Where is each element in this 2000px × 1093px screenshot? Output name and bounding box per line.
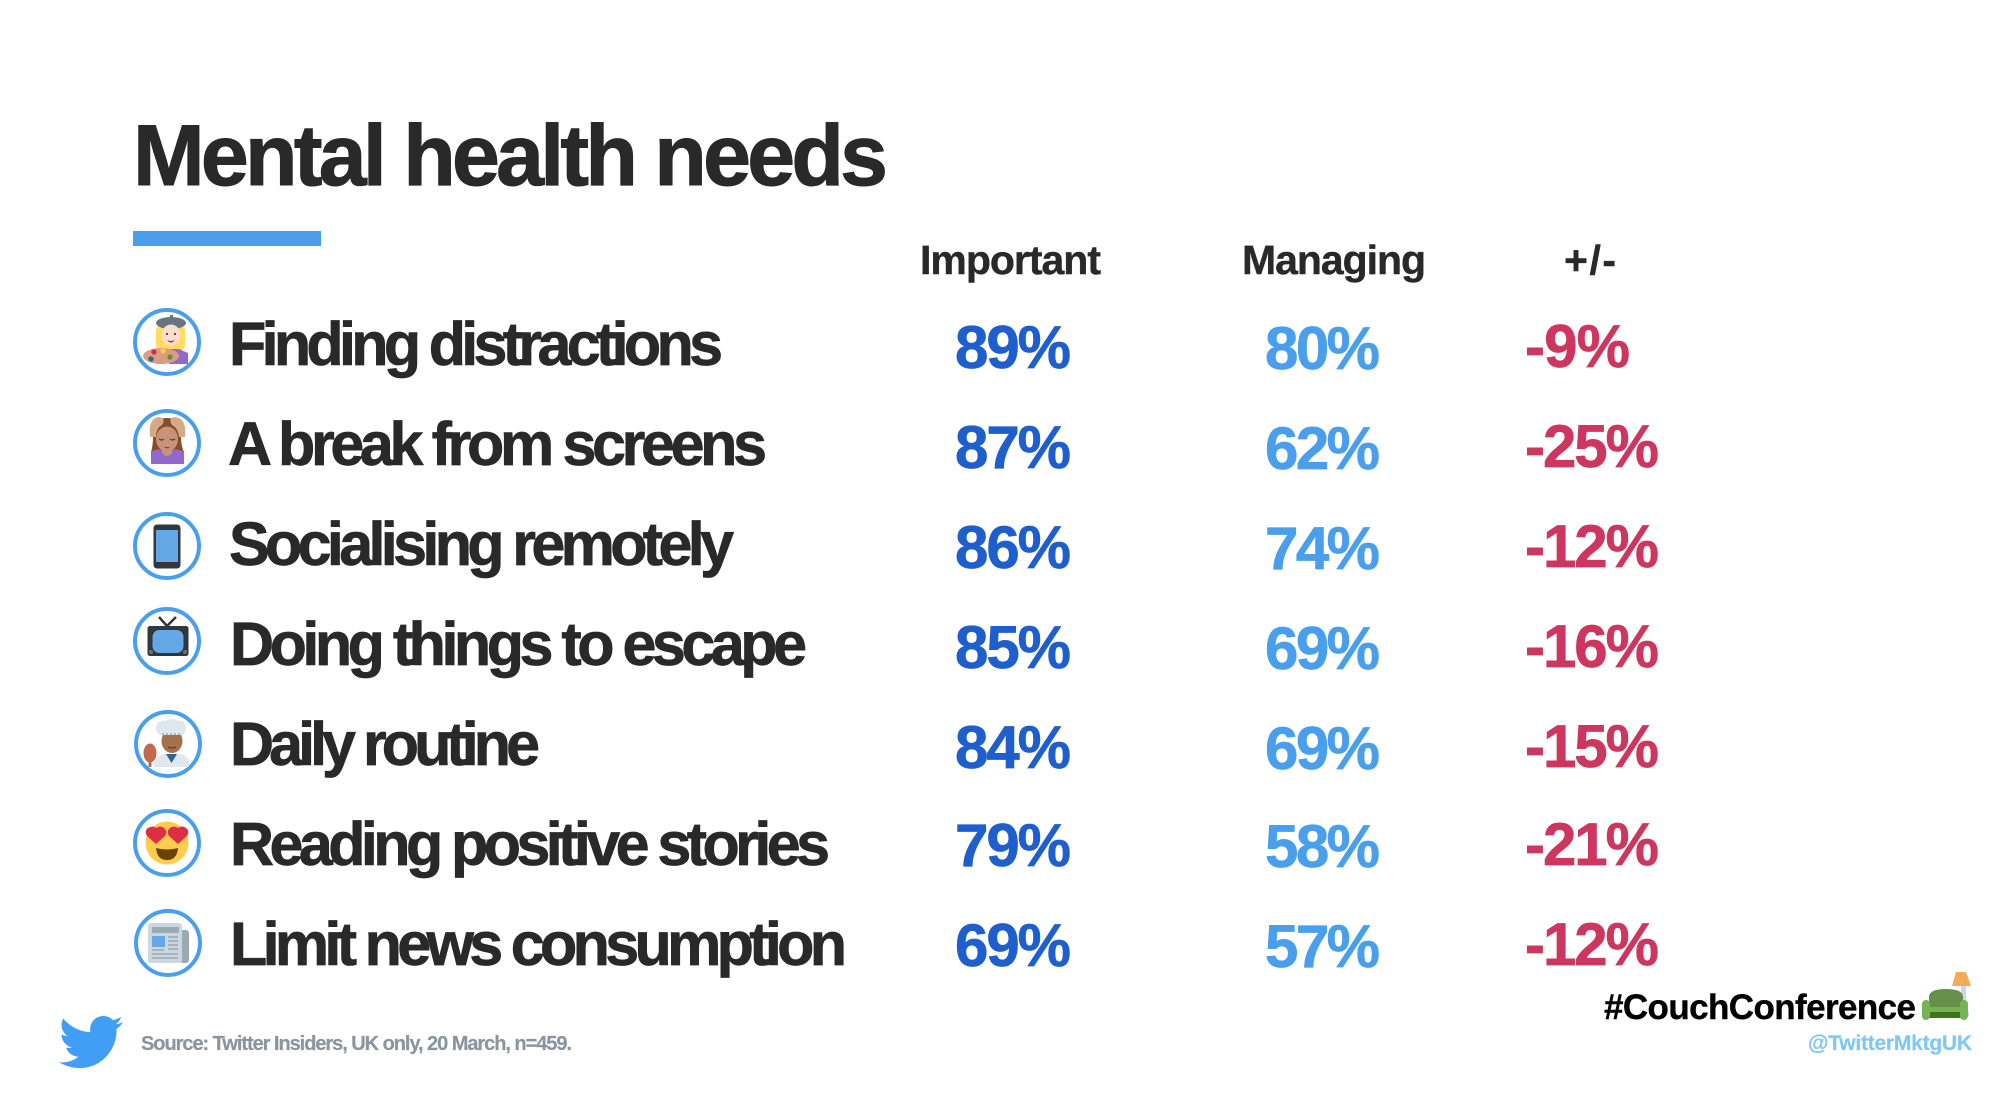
icon: chef: [136, 712, 200, 776]
values: 58%: [1265, 813, 1380, 880]
values: [955, 613, 1659, 682]
values: 57%: [1265, 913, 1380, 980]
values: 86%: [955, 514, 1071, 581]
values: 84%: [955, 714, 1071, 781]
icon: artist: [135, 310, 199, 374]
values: [955, 811, 1659, 880]
label: Doing things to escape: [230, 610, 807, 678]
icon: twitter bird: [59, 1016, 123, 1068]
row: doing things to escape: [135, 609, 1659, 682]
values: 80%: [1265, 315, 1380, 382]
title accent bar: [133, 231, 321, 246]
column headers: Important: [920, 237, 1101, 283]
label: Limit news consumption: [230, 910, 847, 978]
values: -15%: [1525, 713, 1659, 780]
values: 85%: [955, 614, 1071, 681]
values: 89%: [955, 314, 1071, 381]
label: A break from screens: [228, 410, 767, 478]
icon: couch and lamp: [1922, 972, 1971, 1020]
source note: Source: Twitter Insiders, UK only, 20 March, n=459.: [141, 1033, 572, 1055]
hashtag: #CouchConference: [1604, 988, 1916, 1027]
icon: head massage: [135, 411, 199, 475]
label: Socialising remotely: [229, 510, 734, 578]
values: [955, 513, 1659, 582]
values: [955, 713, 1659, 782]
icon: heart eyes: [135, 811, 199, 875]
handle: @TwitterMktgUK: [1808, 1032, 1972, 1055]
row: a break from screens: [135, 410, 1659, 482]
values: -16%: [1525, 613, 1659, 680]
icon: newspaper: [136, 911, 200, 975]
values: [955, 413, 1659, 482]
column headers: Managing: [1242, 237, 1426, 283]
row: daily routine: [136, 710, 1659, 782]
values: -12%: [1525, 513, 1659, 580]
values: 74%: [1265, 515, 1380, 582]
values: 69%: [955, 912, 1071, 979]
label: Reading positive stories: [230, 810, 830, 878]
label: Daily routine: [230, 710, 540, 778]
row: limit news consumption: [136, 910, 1659, 980]
values: 87%: [955, 414, 1071, 481]
values: [955, 313, 1630, 382]
values: -12%: [1525, 911, 1659, 978]
values: -25%: [1525, 413, 1659, 480]
title: Mental health needs: [133, 108, 888, 204]
row: finding distractions: [135, 310, 1630, 382]
values: 69%: [1265, 615, 1380, 682]
values: 62%: [1265, 415, 1380, 482]
icon: phone: [135, 514, 199, 578]
column headers: [920, 237, 1616, 283]
values: -9%: [1525, 313, 1630, 380]
label: Finding distractions: [229, 310, 723, 378]
row: reading positive stories: [135, 810, 1659, 880]
column headers: +/-: [1564, 237, 1616, 283]
icon: television: [135, 609, 199, 673]
row: socialising remotely: [135, 510, 1659, 582]
values: [955, 911, 1659, 980]
values: 79%: [955, 812, 1071, 879]
values: 69%: [1265, 715, 1380, 782]
values: -21%: [1525, 811, 1659, 878]
